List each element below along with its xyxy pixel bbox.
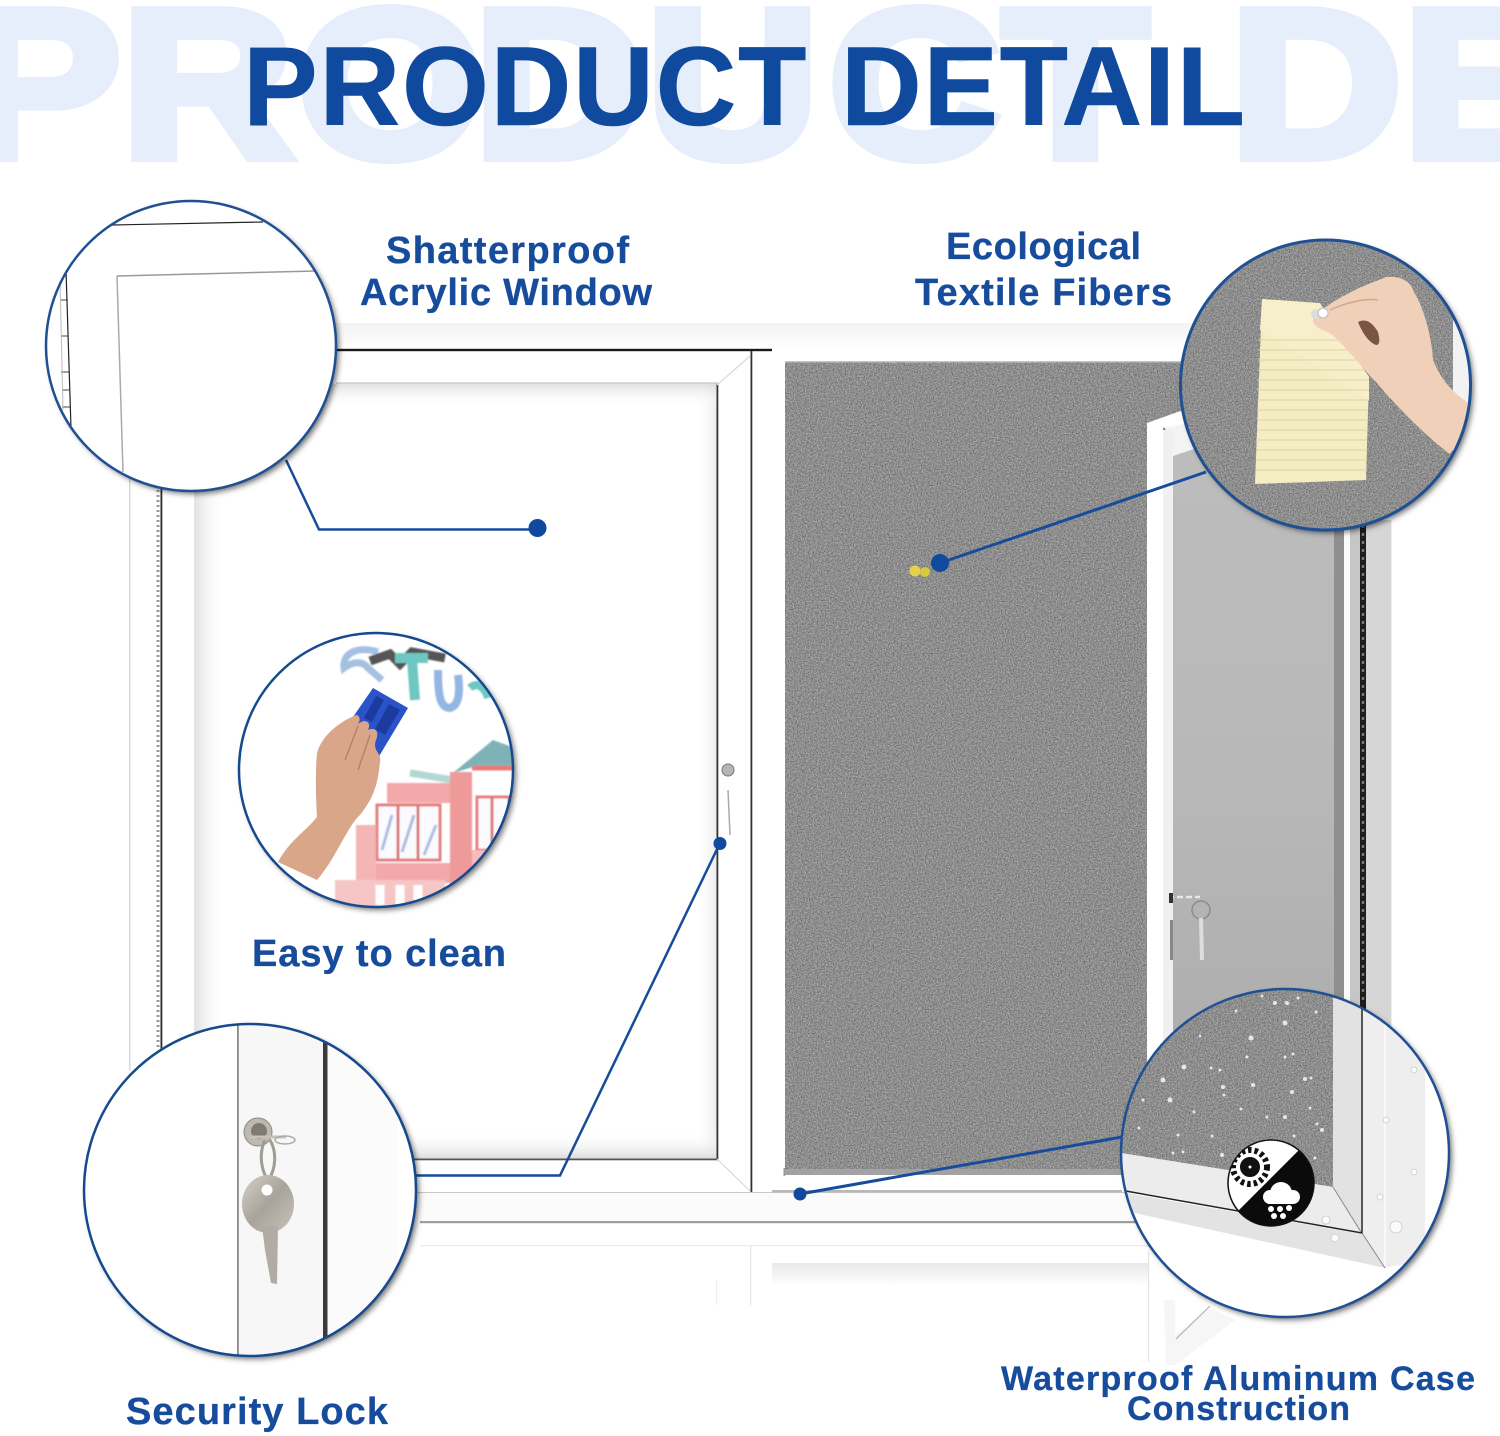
push pin	[1311, 308, 1328, 319]
lock on left door	[722, 764, 734, 835]
blue eraser	[354, 688, 408, 756]
cabinet top band	[336, 323, 1196, 350]
yellow push pins	[910, 566, 930, 577]
door edge with lock and key	[237, 1026, 328, 1354]
label: waterproof aluminum case construction: Construction	[1127, 1390, 1350, 1428]
cabinet left frame	[129, 470, 196, 1170]
felt board panel	[785, 362, 1200, 1169]
hand pressing pin	[1313, 277, 1467, 454]
main title: PRODUCT DETAIL	[243, 24, 1245, 149]
left door frame lines	[336, 349, 1136, 1193]
callout circle: waterproof aluminum corner	[1115, 985, 1449, 1317]
label: shatterproof acrylic window: Acrylic Window	[360, 272, 652, 314]
marker lettering	[344, 650, 488, 708]
label: shatterproof acrylic window: Shatterproof	[386, 230, 629, 272]
callout circle: acrylic window	[46, 201, 336, 491]
label: shatterproof acrylic window	[360, 230, 652, 314]
callout circle: eraser on whiteboard	[239, 633, 515, 910]
sketched red house	[335, 740, 515, 910]
whiteboard drawing and eraser	[278, 650, 515, 910]
label: ecological textile fibers	[915, 226, 1172, 314]
key	[242, 1175, 294, 1284]
left door glass panel	[195, 382, 718, 1160]
aluminum corner with droplets	[1115, 985, 1425, 1268]
open door	[1147, 404, 1392, 1110]
weather icon badge	[1227, 1139, 1315, 1227]
label: waterproof aluminum case construction	[1001, 1360, 1475, 1428]
bulletin board cabinet	[129, 323, 1392, 1365]
label: security lock: Security Lock	[126, 1391, 389, 1433]
leader: textile fibers	[931, 472, 1206, 572]
door brace below cabinet	[1164, 1300, 1235, 1365]
rain cloud	[1263, 1182, 1300, 1219]
label: waterproof aluminum case construction: Waterproof Aluminum Case	[1001, 1360, 1475, 1398]
label: ecological textile fibers: Ecological	[946, 226, 1141, 268]
key ring	[261, 1140, 275, 1180]
label: ecological textile fibers: Textile Fibers	[915, 272, 1172, 314]
hand holding eraser	[278, 715, 380, 880]
window corner detail	[60, 222, 316, 472]
sticky note	[1255, 299, 1369, 484]
leader: waterproof case	[794, 1137, 1122, 1200]
callout circle: security lock and key	[84, 1020, 416, 1360]
bottom frame band	[420, 1193, 1136, 1223]
floor reflection	[420, 1245, 1150, 1362]
felt panel frame details	[772, 350, 1196, 1192]
lock cylinder	[244, 1118, 295, 1146]
callout circle: textile fibers with note and hand	[1178, 236, 1473, 534]
water droplets	[1138, 994, 1324, 1160]
sun	[1233, 1150, 1267, 1184]
label: easy to clean: Easy to clean	[252, 933, 506, 975]
leader: acrylic window	[286, 460, 546, 537]
lock on open door	[1168, 893, 1210, 960]
felt, note and hand detail	[1178, 236, 1473, 534]
leader: security lock	[416, 837, 726, 1176]
